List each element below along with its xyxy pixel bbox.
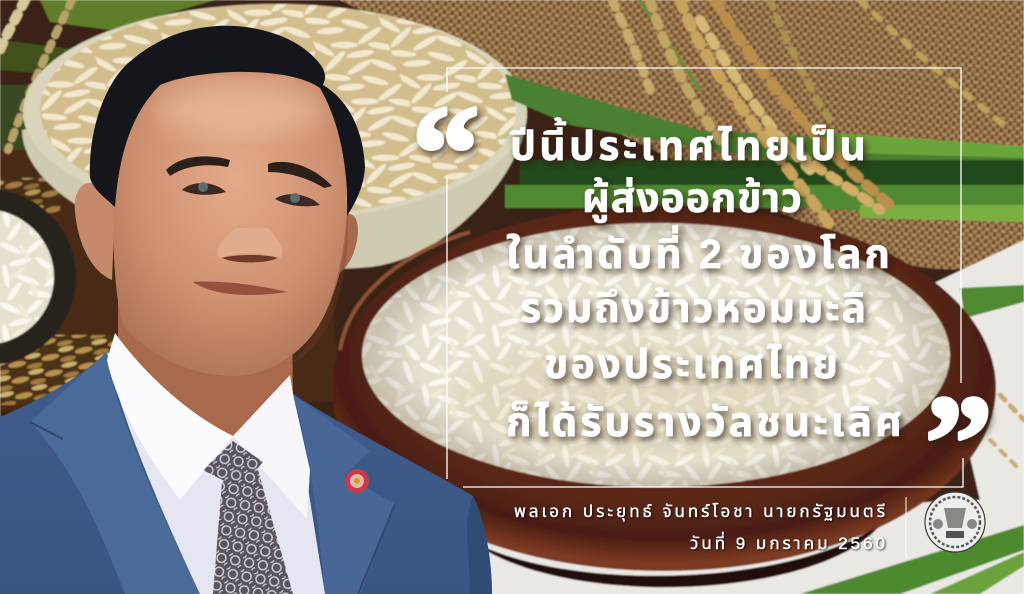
lapel pin — [345, 469, 369, 493]
eyebrows — [166, 156, 332, 188]
line 4: รวมถึงข้าวหอมมะลิ — [520, 285, 866, 331]
neck — [118, 300, 293, 436]
top-left green leaf — [40, 0, 215, 30]
hair — [90, 26, 365, 216]
top bowl with brown rice — [22, 4, 527, 269]
line 5: ของประเทศไทย — [544, 341, 838, 387]
line 1: ปีนี้ประเทศไทยเป็น — [509, 117, 866, 169]
green stalks — [505, 74, 1024, 594]
left golden grains — [0, 178, 125, 405]
ears — [75, 183, 358, 280]
line 6: ก็ได้รับรางวัลชนะเลิศ — [506, 399, 902, 445]
collar — [107, 333, 310, 519]
opening quote mark: “ — [412, 79, 480, 228]
mouth — [193, 281, 287, 295]
icon: government seal — [925, 492, 985, 552]
forehead highlight — [155, 82, 325, 138]
line 3: ในลำดับที่ 2 ของโลก — [506, 225, 890, 277]
eyes — [182, 182, 320, 206]
shirt — [107, 352, 325, 594]
dark woven mat at left — [0, 60, 340, 420]
speaker name: พลเอก ประยุทธ์ จันทร์โอชา นายกรัฐมนตรี — [514, 502, 885, 522]
person: portrait — [0, 26, 492, 594]
quote text — [506, 117, 902, 445]
cheek shadow — [290, 205, 348, 364]
tie — [203, 441, 293, 594]
left panicles — [0, 0, 72, 150]
face — [113, 70, 347, 376]
divider — [906, 497, 907, 558]
suit jacket — [0, 352, 492, 594]
small bowl left — [0, 189, 76, 365]
quote frame — [447, 68, 963, 487]
attribution — [514, 502, 885, 553]
large bowl with white rice — [332, 205, 996, 587]
line 2: ผู้ส่งออกข้าว — [582, 175, 802, 223]
closing quote mark: ” — [925, 369, 992, 518]
white table — [480, 240, 1024, 594]
burlap sack — [340, 0, 1024, 269]
date: วันที่ 9 มกราคม 2560 — [690, 531, 885, 553]
golden rice panicles — [612, 0, 1024, 470]
nose — [218, 228, 282, 262]
